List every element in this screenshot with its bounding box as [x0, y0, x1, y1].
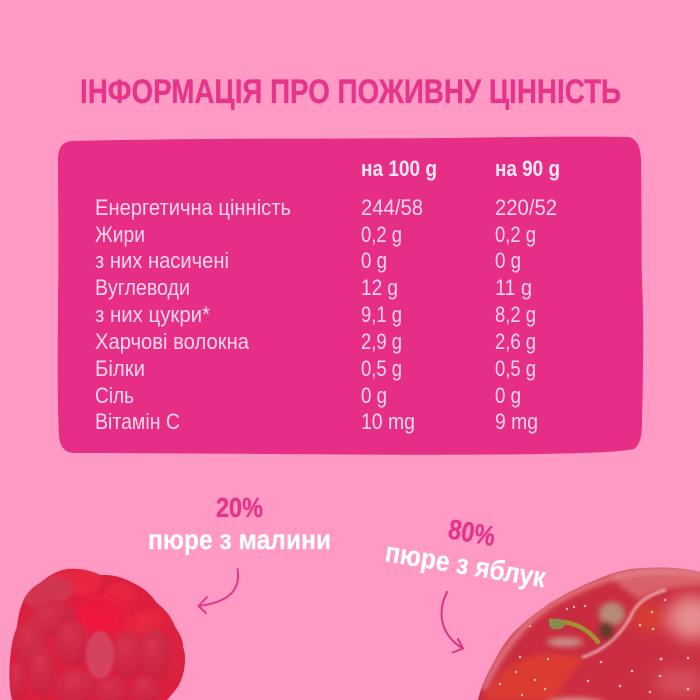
nutrition table	[95, 156, 560, 434]
row: sugars	[95, 302, 536, 327]
row: salt: Сіль	[95, 383, 134, 408]
row: saturated: 0 g	[495, 248, 521, 273]
row: fibre: Харчові волокна	[95, 329, 250, 354]
row: carbohydrates: 12 g	[361, 275, 398, 300]
row: energy: 220/52	[495, 195, 557, 220]
row: protein: Білки	[95, 356, 145, 381]
arrow: to raspberry	[198, 569, 238, 613]
apple: upper lobe shading	[547, 568, 700, 647]
callout: raspberry share: 20%	[216, 492, 263, 523]
apple: lower left lobe	[484, 653, 585, 700]
row: protein	[95, 356, 536, 381]
column headers	[361, 156, 560, 181]
row: protein: 0,5 g	[361, 356, 402, 381]
callout: raspberry share: пюре з малини	[148, 524, 331, 555]
row: fat	[95, 222, 536, 247]
callout: apple share: пюре з яблук	[383, 536, 549, 594]
apple: skin speckles	[499, 599, 689, 696]
row: saturated: з них насичені	[95, 248, 229, 273]
callout: raspberry share	[148, 492, 331, 555]
row: carbohydrates	[95, 275, 532, 300]
apple: right body	[545, 588, 700, 700]
row: carbohydrates: 11 g	[495, 275, 532, 300]
column headers: на 100 g	[361, 156, 437, 181]
row: energy: Енергетична цінність	[95, 195, 291, 220]
row: salt: 0 g	[361, 383, 387, 408]
row: sugars: 8,2 g	[495, 302, 536, 327]
column headers: на 90 g	[495, 156, 560, 181]
row: fibre: 2,9 g	[361, 329, 402, 354]
icon: raspberry	[9, 568, 185, 700]
row: energy	[95, 195, 557, 220]
row: salt	[95, 383, 521, 408]
apple: pale rim	[484, 571, 700, 690]
row: carbohydrates: Вуглеводи	[95, 275, 190, 300]
row: energy: 244/58	[361, 195, 423, 220]
callout: apple share	[383, 513, 549, 594]
row: sugars: з них цукри*	[95, 302, 210, 327]
apple: cavity shadow	[599, 623, 613, 639]
row: vitamin C: 10 mg	[361, 409, 415, 434]
row: fat: 0,2 g	[361, 222, 402, 247]
apple: valley highlight	[583, 590, 665, 657]
row: fibre	[95, 329, 536, 354]
arrow: to apple	[442, 592, 463, 652]
row: fibre: 2,6 g	[495, 329, 536, 354]
row: vitamin C: Вітамін С	[95, 409, 180, 434]
row: saturated: 0 g	[361, 248, 387, 273]
apple: bottom pale reflection	[545, 698, 605, 700]
icon: apple	[470, 560, 700, 700]
panel: nutrition table background	[58, 137, 643, 455]
row: vitamin C: 9 mg	[495, 409, 538, 434]
row: protein: 0,5 g	[495, 356, 536, 381]
row: salt: 0 g	[495, 383, 521, 408]
apple: stalk	[551, 621, 598, 642]
row: fat: Жири	[95, 222, 145, 247]
callout: apple share: 80%	[446, 513, 498, 552]
row: fat: 0,2 g	[495, 222, 536, 247]
row: vitamin C	[95, 409, 538, 434]
row: sugars: 9,1 g	[361, 302, 402, 327]
row: saturated	[95, 248, 521, 273]
apple: stalk tip	[549, 618, 565, 630]
